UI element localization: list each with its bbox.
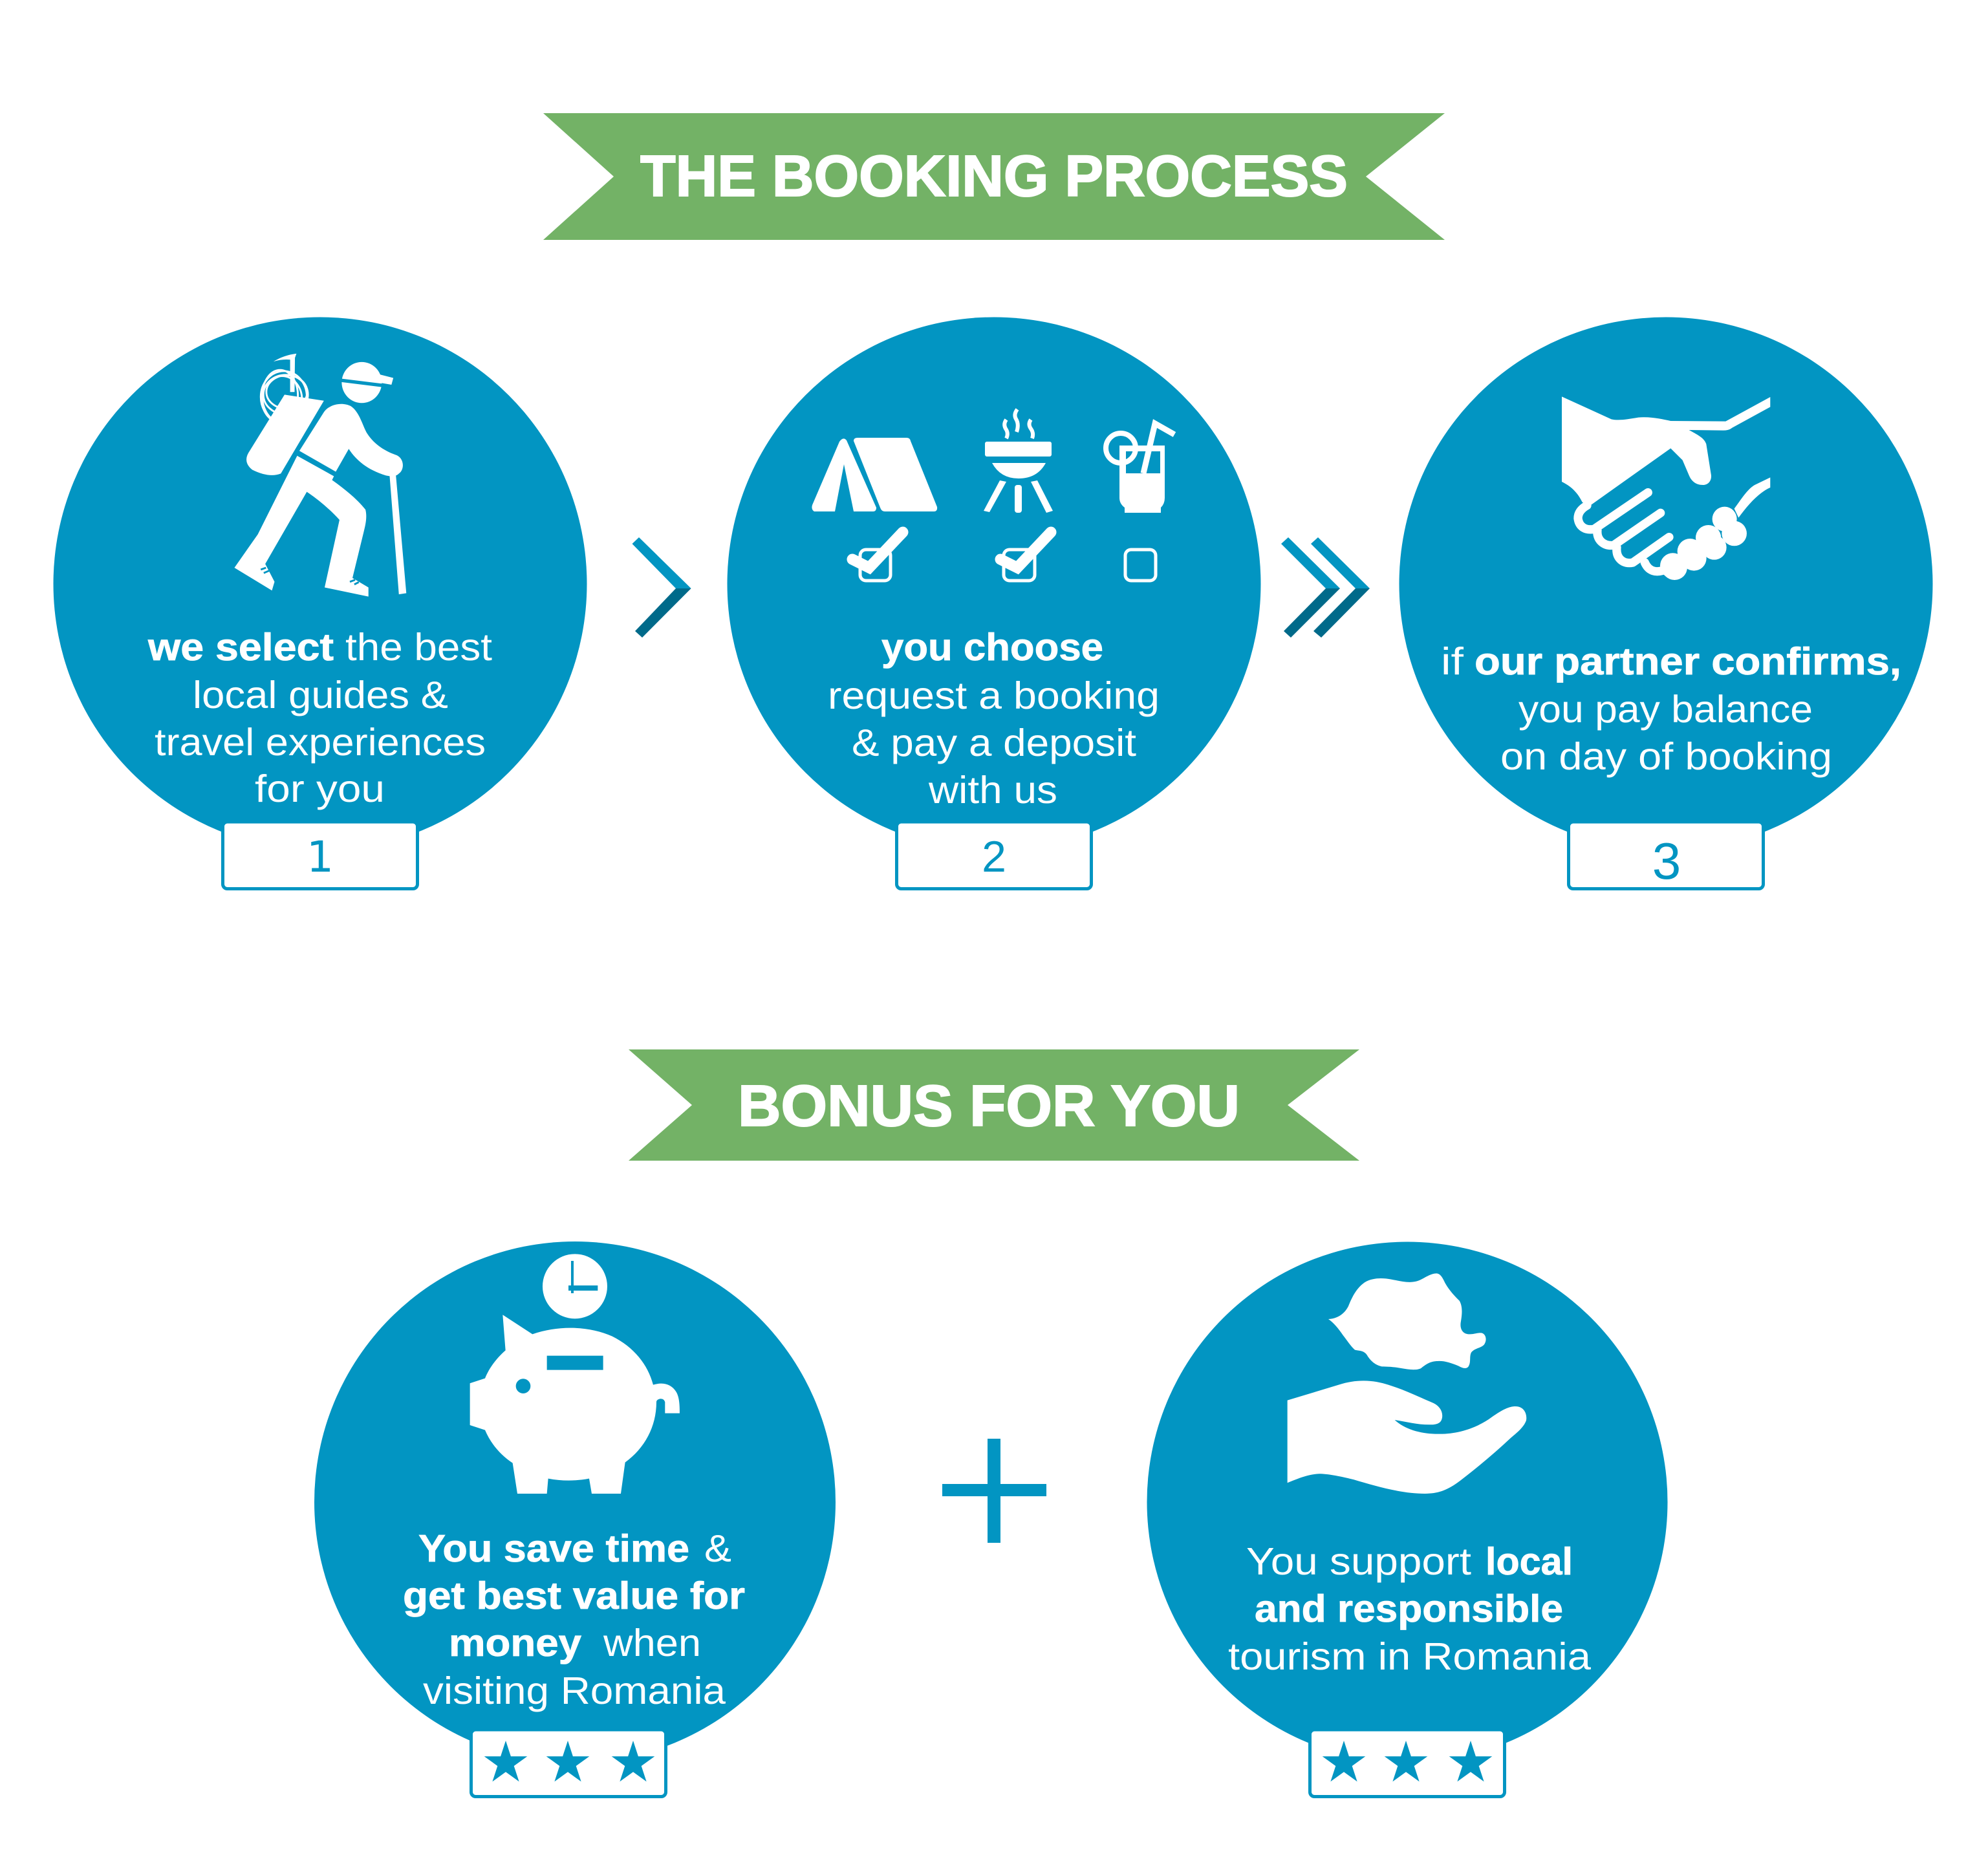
text block: step 3 (1441, 640, 1901, 778)
icon: checked box 2 (1000, 532, 1051, 581)
panel: step 1 we select (53, 317, 587, 888)
text block: step 3: our partner confirms, (1475, 640, 1901, 683)
text block: support local: tourism in Romania (1228, 1635, 1591, 1678)
icon: open hand (1288, 1381, 1526, 1494)
number box: 1 (222, 822, 418, 888)
text block: save time: when (603, 1622, 701, 1664)
icon: handshake (1562, 396, 1770, 580)
icon: piggy bank (470, 1315, 680, 1494)
icon: cocktail drink (1106, 424, 1174, 513)
text block: step 1: travel experiences (155, 721, 486, 764)
icon: empty box (1125, 550, 1156, 581)
text block: support local (1228, 1540, 1591, 1678)
number box: 2 (896, 822, 1092, 888)
text block: step 2: & pay a deposit (852, 722, 1136, 764)
icon: checked box 1 (852, 532, 903, 581)
heading banner: the booking process (543, 113, 1445, 240)
arrow: double chevron (1281, 537, 1370, 638)
heading banner: bonus for you (629, 1049, 1359, 1161)
text block: step 2: request a booking (828, 674, 1160, 717)
panel: bonus support local tourism (1147, 1241, 1667, 1796)
text block: step 3: you pay balance (1518, 688, 1813, 731)
text block: support local: local (1486, 1540, 1573, 1583)
heading banner: bonus for you: BONUS FOR YOU (738, 1074, 1240, 1139)
panel: step 2 you choose (727, 317, 1261, 888)
rating box: three stars (1310, 1730, 1504, 1796)
text block: save time: get best value for (403, 1574, 745, 1617)
icon: clock (543, 1254, 607, 1318)
text block: step 2: you choose (881, 626, 1103, 669)
text block: step 1 (147, 626, 492, 810)
text block: support local: and responsible (1255, 1587, 1563, 1630)
icon: plus sign (942, 1439, 1046, 1543)
text block: save time: & (704, 1527, 731, 1570)
icon: tent (812, 438, 937, 511)
number box: 2: 2 (982, 832, 1006, 881)
text block: step 1: we select (147, 626, 334, 669)
arrow: single chevron (632, 537, 691, 638)
text block: support local: You support (1246, 1540, 1471, 1583)
number box: 3: 3 (1652, 832, 1681, 890)
text block: save time: visiting Romania (423, 1670, 726, 1712)
text block: save time (403, 1527, 745, 1712)
text block: step 2: with us (928, 769, 1057, 811)
text block: save time: You save time (418, 1527, 689, 1570)
text block: step 1: the best (345, 626, 492, 669)
icon: barbecue grill (984, 409, 1053, 513)
text block: step 3: on day of booking (1500, 735, 1832, 778)
heading banner: the booking process: THE BOOKING PROCESS (640, 144, 1348, 209)
text block: step 2 (828, 626, 1160, 811)
panel: bonus save time and money (314, 1241, 836, 1796)
rating box: three stars (471, 1730, 666, 1796)
text block: step 1: for you (255, 768, 385, 810)
panel: step 3 partner confirms (1399, 317, 1932, 890)
icon: map of Romania (1328, 1273, 1486, 1370)
number box: 1: 1 (307, 832, 334, 882)
icon: hiker (234, 354, 406, 597)
text block: save time: money (449, 1622, 581, 1664)
number box: 3 (1569, 822, 1763, 890)
text block: step 3: if (1441, 640, 1464, 683)
text block: step 1: local guides & (193, 674, 448, 716)
